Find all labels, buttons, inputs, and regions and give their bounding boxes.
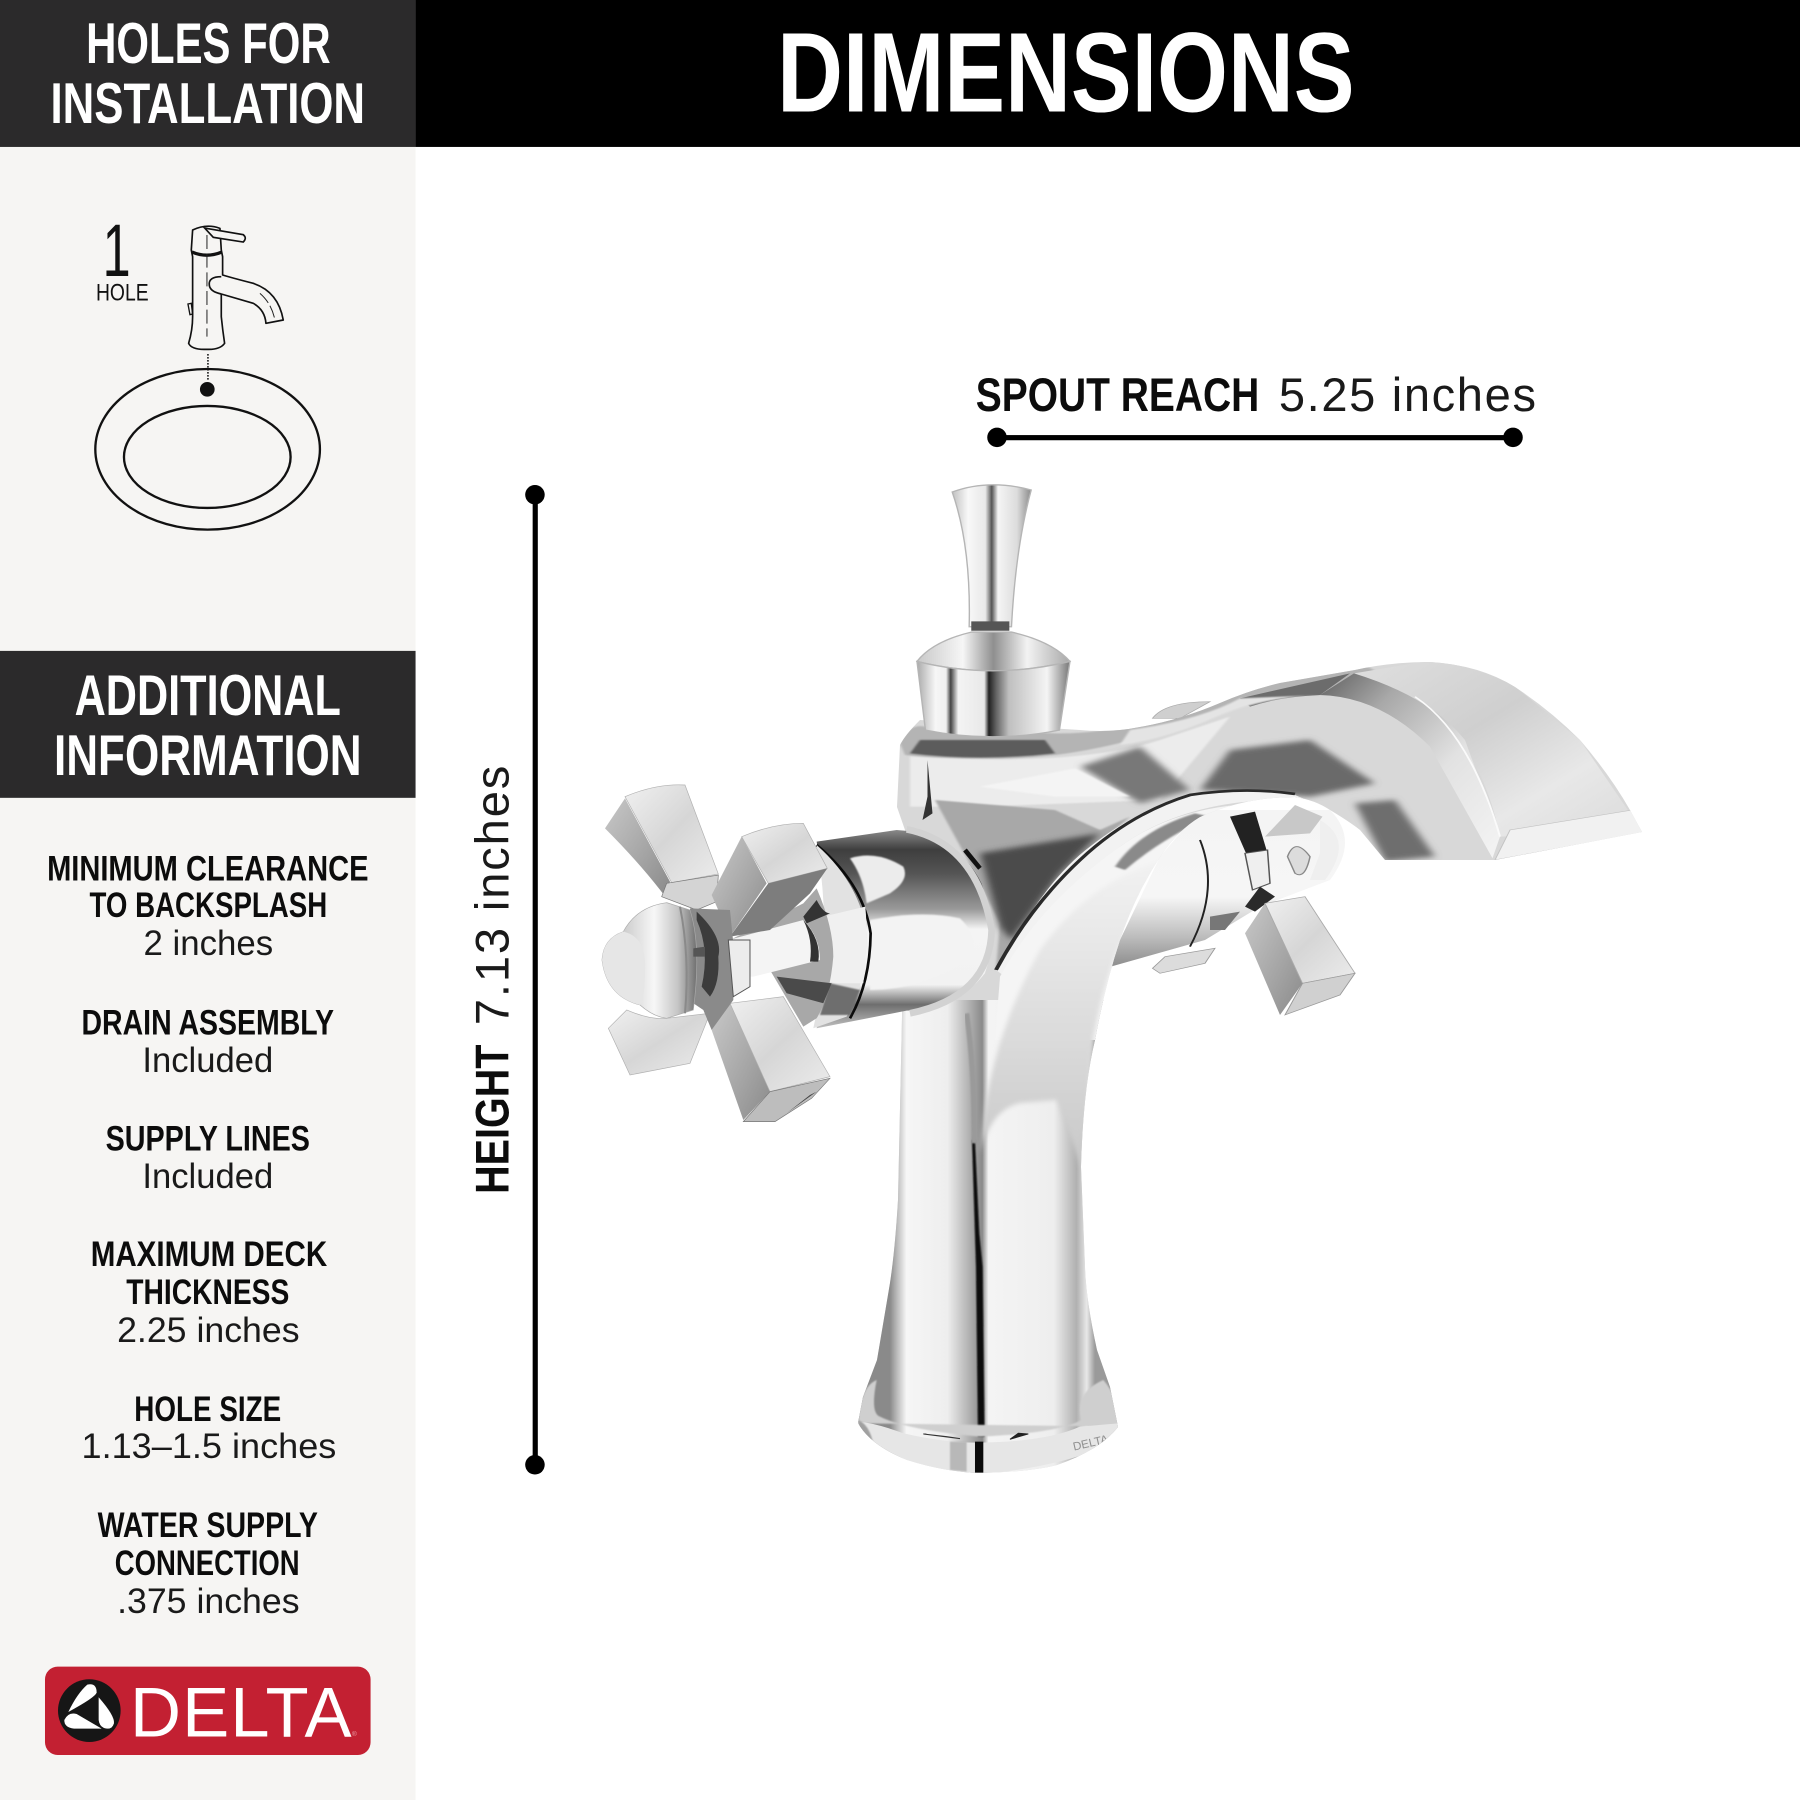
label: height <box>466 766 519 1194</box>
icon: one hole faucet and sink <box>95 209 320 530</box>
left cross handle <box>602 785 830 1122</box>
title bar: dimensions <box>416 0 1800 147</box>
stem reflections <box>857 1013 1120 1475</box>
heading: holes for installation: INSTALLATION <box>51 72 365 136</box>
text: supply lines: Included <box>142 1156 273 1196</box>
text: drain assembly <box>82 1002 334 1080</box>
text: water supply connection: WATER SUPPLY <box>98 1505 318 1545</box>
text: maximum deck thickness: THICKNESS <box>126 1272 289 1312</box>
text: maximum deck thickness: 2.25 inches <box>117 1310 300 1350</box>
text: water supply connection: CONNECTION <box>115 1543 300 1583</box>
text: supply lines: SUPPLY LINES <box>106 1118 310 1158</box>
logo: delta: DELTA <box>130 1673 352 1752</box>
label: height: 7.13 inches <box>466 766 519 1025</box>
stem reflections: DELTA <box>1072 1433 1110 1454</box>
text: maximum deck thickness: MAXIMUM DECK <box>91 1234 327 1274</box>
text: hole size: 1.13–1.5 inches <box>82 1426 336 1466</box>
text: drain assembly: DRAIN ASSEMBLY <box>82 1002 334 1042</box>
text: supply lines <box>106 1118 310 1196</box>
heading: holes for installation: HOLES FOR <box>86 12 331 76</box>
text: minimum clearance: 2 inches <box>143 923 273 963</box>
logo: delta: ® <box>352 1730 357 1738</box>
arrow: height measure <box>525 485 545 1475</box>
arch front <box>998 806 1231 1040</box>
text: maximum deck thickness <box>91 1234 327 1350</box>
text: minimum clearance <box>47 848 368 963</box>
text: water supply connection: .375 inches <box>117 1581 300 1621</box>
text: minimum clearance: TO BACKSPLASH <box>90 885 327 925</box>
heading: additional information: INFORMATION <box>54 724 362 788</box>
logo: delta <box>45 1667 371 1755</box>
heading: additional information: ADDITIONAL <box>75 664 341 728</box>
label: spout reach: 5.25 inches <box>1279 368 1536 421</box>
left cylinder and flange <box>728 829 992 1028</box>
text: hole size: HOLE SIZE <box>134 1389 281 1429</box>
label: spout reach: SPOUT REACH <box>976 368 1259 421</box>
label: height: HEIGHT <box>466 1044 519 1194</box>
faucet body <box>850 650 1650 1480</box>
spout upper reflections <box>900 660 1435 977</box>
heading: holes for installation <box>0 0 416 147</box>
spout bevel and outlet face <box>1120 661 1643 860</box>
heading: additional information <box>0 651 416 798</box>
text: hole size <box>82 1389 336 1466</box>
inner arch shading <box>980 901 1134 1158</box>
arrow: spout reach measure <box>987 428 1523 447</box>
icon: one hole faucet and sink: 1 <box>103 209 131 292</box>
text: drain assembly: Included <box>142 1040 273 1080</box>
pump knob <box>917 485 1070 737</box>
right handle behind spout <box>1105 702 1355 1015</box>
text: minimum clearance: MINIMUM CLEARANCE <box>47 848 368 888</box>
text: water supply connection <box>98 1505 318 1621</box>
title bar: dimensions: DIMENSIONS <box>777 9 1355 136</box>
label: spout reach <box>976 368 1536 421</box>
illustration: chrome faucet <box>602 485 1650 1480</box>
panel: sidebar <box>0 0 416 1800</box>
icon: one hole faucet and sink: HOLE <box>96 280 149 307</box>
